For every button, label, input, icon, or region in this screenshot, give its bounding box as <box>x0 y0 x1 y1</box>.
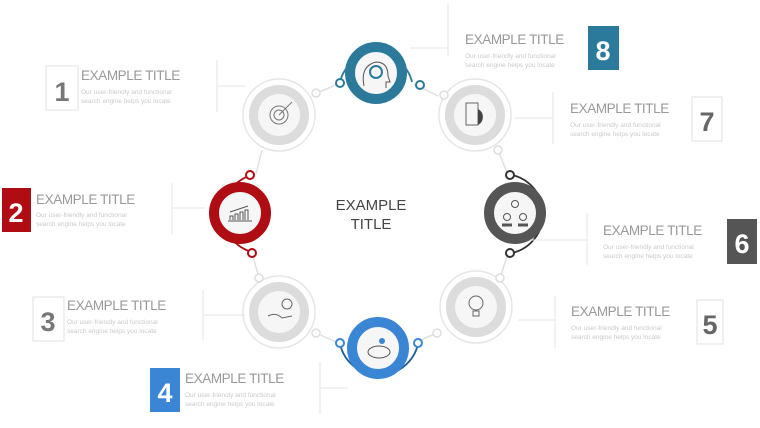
connectors ring <box>252 84 508 342</box>
text 4: Our user-friendly and functional <box>185 392 276 399</box>
text 1: search engine helps you locate <box>81 98 171 105</box>
node 1 <box>243 79 320 151</box>
text 2: Our user-friendly and functional <box>36 212 127 219</box>
text 3: search engine helps you locate <box>67 328 157 335</box>
node 5 <box>433 271 512 343</box>
text 6: 6 <box>734 229 750 259</box>
text 5: 5 <box>702 310 718 340</box>
text 2: search engine helps you locate <box>36 221 126 228</box>
text 3: Our user-friendly and functional <box>67 319 158 326</box>
text 7: EXAMPLE TITLE <box>570 101 669 116</box>
text 7: 7 <box>699 107 715 137</box>
text 8: EXAMPLE TITLE <box>465 32 564 47</box>
text 5: search engine helps you locate <box>571 334 661 341</box>
text 8: Our user-friendly and functional <box>465 53 556 60</box>
text 5 <box>518 296 723 348</box>
text 1 <box>46 60 245 112</box>
text 4: EXAMPLE TITLE <box>185 371 284 386</box>
text 4: search engine helps you locate <box>185 401 275 408</box>
node 6 dark <box>489 171 543 257</box>
node 3 <box>243 274 320 348</box>
text 2: 2 <box>8 198 24 228</box>
text 1: EXAMPLE TITLE <box>81 68 180 83</box>
center title: EXAMPLE <box>336 197 406 214</box>
center title: TITLE <box>351 216 391 233</box>
text 7: search engine helps you locate <box>570 131 660 138</box>
node 4 blue <box>336 322 422 375</box>
text 2 <box>2 183 205 235</box>
text 1: 1 <box>54 77 70 107</box>
text 3 <box>33 290 245 341</box>
text 7 <box>515 92 722 144</box>
text 5: Our user-friendly and functional <box>571 325 662 332</box>
node 7 <box>439 79 511 154</box>
node 8 teal <box>336 47 424 99</box>
text 6 <box>530 213 757 265</box>
text 7: Our user-friendly and functional <box>570 122 661 129</box>
text 2: EXAMPLE TITLE <box>36 192 135 207</box>
text 1: Our user-friendly and functional <box>81 89 172 96</box>
text 6: search engine helps you locate <box>603 253 693 260</box>
text 8: 8 <box>595 36 611 66</box>
node 2 red <box>214 171 266 257</box>
text 6: Our user-friendly and functional <box>603 244 694 251</box>
center title <box>336 197 406 233</box>
text 3: EXAMPLE TITLE <box>67 298 166 313</box>
text 8: search engine helps you locate <box>465 62 555 69</box>
text 6: EXAMPLE TITLE <box>603 223 702 238</box>
text 5: EXAMPLE TITLE <box>571 304 670 319</box>
text 4: 4 <box>157 378 173 408</box>
text 3: 3 <box>40 307 56 337</box>
text 4 <box>150 362 348 414</box>
text 8 <box>410 4 619 70</box>
